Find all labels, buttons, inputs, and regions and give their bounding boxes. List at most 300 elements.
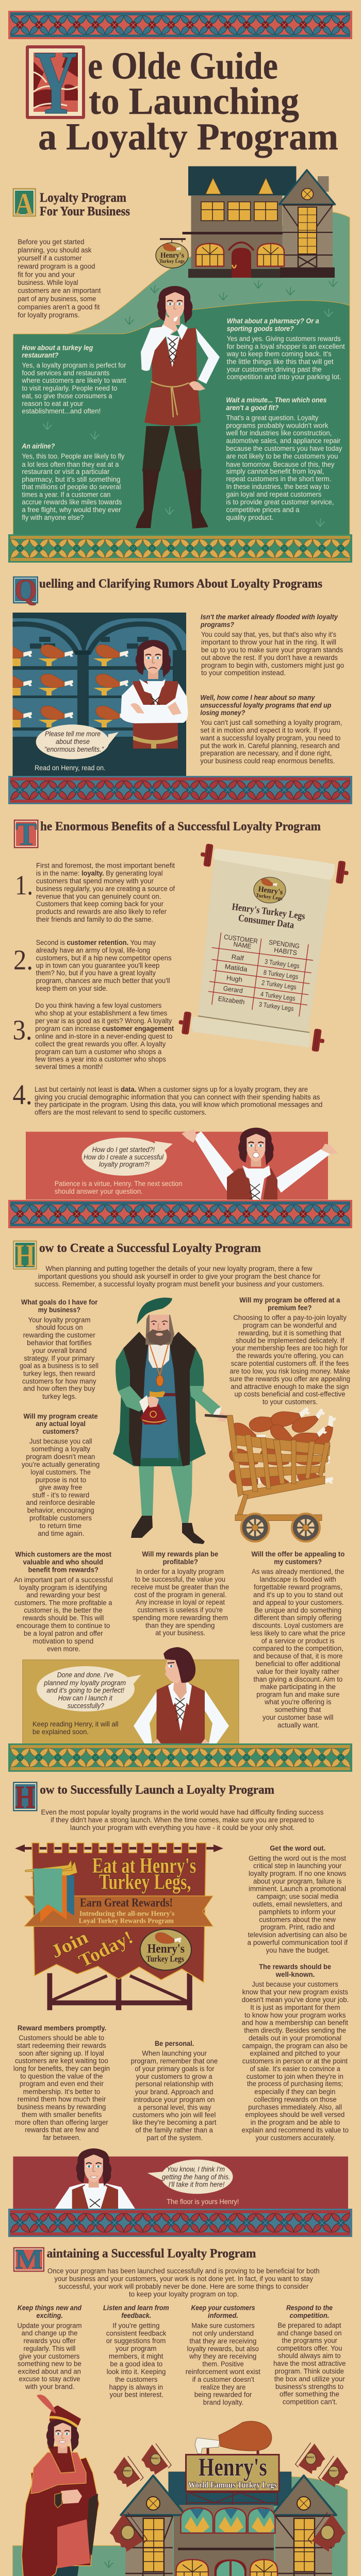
column: keep things new: Keep things new and — [18, 2304, 82, 2312]
text: which aren't a good fit: competitive prices and a — [226, 506, 300, 514]
text: actual loyal customers: stuff - it's to reward — [32, 1491, 89, 1499]
heading: A — [15, 187, 34, 221]
column: keep customers informed: realize they are — [201, 2383, 245, 2391]
text: get the word out: program. Print, radio and — [260, 1923, 334, 1931]
intro: successful, your work will probably never be done. Here are some things to consider — [58, 2282, 309, 2291]
table text: Elizabeth — [218, 995, 245, 1006]
text: be personal — [131, 2040, 218, 2142]
title text: to Launching — [89, 80, 299, 123]
text: appealing offer: Be unique and do something — [254, 1606, 341, 1614]
text: get the word out: campaign; use social media — [257, 1893, 339, 1900]
text: reward members promptly — [13, 2024, 110, 2141]
text: appealing offer: my customers? — [274, 1558, 322, 1566]
heading: he Enormous Benefits of a Successful Loyalty Program — [40, 820, 321, 834]
column: listen and learn: feedback. — [121, 2312, 151, 2319]
column: respond to the competition: offer something the — [280, 2391, 339, 2398]
intro: Even the most popular loyalty programs in the world would have had difficulty finding success — [41, 1808, 323, 1816]
text: appealing offer: what you're offering is — [264, 1698, 332, 1706]
text: most valuable customers: Which customers are the most — [15, 1551, 111, 1558]
roof sign: World Famous Turkey Legs — [188, 2480, 277, 2489]
intro text: planning, you should ask — [18, 246, 92, 254]
flag and wall logo lettering: Henry's — [151, 2458, 161, 2460]
text: goals: should focus on — [36, 1324, 83, 1331]
text: goals: rewarding the customer — [23, 1331, 95, 1339]
text: premium fee — [229, 1296, 350, 1405]
column: keep customers informed: Keep your customers — [191, 2304, 255, 2312]
benefit 2: customers, but if a hip new competitor opens — [36, 954, 172, 962]
text: well-known rewards: especially if they can begin — [254, 2088, 335, 2096]
intro: if they didn't have a strong launch. When the time comes, make sure you are prepared to — [51, 1816, 314, 1824]
flag and wall logo lettering — [123, 2456, 339, 2472]
text: well-known rewards: customer to join when they're in — [247, 2073, 343, 2080]
text: pharmacy: the little things like this that will get — [227, 358, 334, 366]
text: well-known rewards: your customers accurately. — [256, 2134, 335, 2142]
text: which aren't a good fit: is to provide great customer service, — [226, 498, 334, 506]
text: turkey leg restaurant: food services and restaurants — [22, 369, 110, 377]
heading: ow to Successfully Launch a Loyalty Program — [40, 1784, 274, 1797]
caption — [55, 1180, 183, 1195]
column: listen and learn: consistent feedback — [106, 2330, 167, 2337]
text: well-known rewards: explain and recommend its value to — [242, 2126, 349, 2134]
text: goals: your overall brand — [32, 1347, 87, 1354]
benefit 3: program can increase customer engagement — [35, 1025, 174, 1032]
text: which aren't a good fit: because the customers you have today — [226, 445, 342, 452]
text: get the word out: customers about the new — [259, 1916, 336, 1924]
panel: maintaining a successful loyalty program — [13, 2244, 348, 2576]
text: market flooded: program to begin with, customers might just go — [201, 662, 344, 669]
text: appealing offer: and it's up to you to stand out — [253, 1591, 343, 1599]
text: market flooded: important to throw your hat in the ring. It will — [201, 638, 336, 646]
speech bubble: done and done: Done and done. I've — [57, 1671, 113, 1679]
text: premium fee: are too low, you risk losing money. Make — [230, 1367, 350, 1375]
table text: Ralf — [231, 953, 244, 962]
text: goals: Your loyalty program — [28, 1316, 91, 1324]
text: appealing offer: and appeal to your customers. — [253, 1599, 343, 1606]
text: well-known rewards: them directly. Besides sending the — [244, 2027, 346, 2034]
text: profitable rewards plan: cost of the program in general. — [134, 1591, 226, 1599]
text: well-known rewards: and how a membership can benefit — [242, 2019, 348, 2027]
gables — [121, 2476, 336, 2576]
intro — [35, 1265, 324, 1288]
heading: Q — [14, 573, 37, 607]
cart of turkey legs — [205, 1400, 338, 1541]
benefit 3 — [12, 1002, 174, 1071]
column: respond to the competition: the box and utilize your — [274, 2375, 345, 2383]
logo: Henry's — [258, 885, 284, 896]
blue border one — [8, 776, 352, 804]
column: keep things new: exciting. — [36, 2312, 63, 2319]
benefit 3: several times a month! — [35, 1063, 103, 1071]
text: most valuable customers: valuable and who should — [23, 1558, 103, 1566]
panel: done and done — [23, 1647, 239, 1744]
text: be personal: of your primary goals is for — [135, 2065, 215, 2073]
text: appealing offer: beneficial to offer additional — [256, 1660, 340, 1668]
text: which aren't a good fit: well for industries like construction, — [225, 429, 332, 437]
text: premium fee: up costs beneficial and cost-effective — [234, 1390, 346, 1398]
benefit 2 — [13, 939, 172, 992]
benefit 1: products and rewards are also likely to refer — [36, 908, 167, 916]
text: be personal: personal relationship with — [135, 2080, 214, 2088]
text: get the word out: a powerful communication tool if — [248, 1939, 348, 1946]
text: premium fee: the rewards you're offering, you can — [236, 1352, 343, 1360]
column: keep customers informed: loyalty rewards, but also — [187, 2345, 259, 2352]
column: keep customers informed: why they are receiving — [189, 2352, 256, 2360]
text: which aren't a good fit: automotive sales, and appliance repair — [226, 437, 341, 445]
heading — [13, 1239, 261, 1274]
text: market flooded: be up to you to make sure your program stands — [201, 646, 343, 654]
benefit 2: them? No, but if you have a great loyalty — [36, 969, 156, 977]
text: reward members promptly: customers are kept waiting too — [15, 2057, 108, 2065]
green border one — [8, 534, 352, 563]
text: which aren't a good fit: have tomorrow. Because of this, they — [226, 461, 335, 468]
caption — [32, 1720, 119, 1736]
table text: Matilda — [224, 962, 248, 973]
column: keep customers informed: that they are receiving — [189, 2337, 256, 2345]
illuminated drop cap Y: Y — [34, 31, 77, 133]
title text — [38, 45, 338, 158]
benefit 3: per year is as good as it gets? Wrong. A loyalty — [35, 1017, 172, 1025]
benefit 3: few times a year into a customer who shops — [35, 1055, 166, 1063]
column: respond to the competition: have the most attractive — [273, 2360, 346, 2367]
text: airline: pharmacy, but it's still something — [22, 476, 120, 483]
intro: to keep your loyalty program on top. — [129, 2291, 239, 2298]
text: well-known rewards: know that your new program exists — [242, 1988, 348, 1996]
text: which aren't a good fit: In these industries, the best way to — [226, 483, 329, 490]
table text: SPENDING — [268, 938, 300, 950]
column: keep things new: give your customers — [19, 2352, 80, 2360]
text: reward members promptly: long for benefits, they can begin — [13, 2065, 110, 2072]
final restaurant building — [110, 2421, 348, 2576]
intro: success. Remember, a successful loyalty program must benefit your business and your customers. — [35, 1280, 324, 1288]
text: well-known rewards: employees should be well versed — [245, 2111, 344, 2119]
banner text: Loyal Turkey Rewards Program — [79, 1918, 174, 1925]
heading — [13, 187, 130, 221]
column: respond to the competition: competitors offer. You — [277, 2344, 342, 2352]
text: pharmacy: sporting goods store? — [227, 325, 294, 333]
text: profitable rewards plan: profitable? — [163, 1558, 198, 1566]
text: which aren't a good fit: Wait a minute... Then which ones — [226, 396, 327, 404]
ribbon — [24, 1896, 213, 1926]
text: turkey leg restaurant: to visit regularly. People need to — [22, 384, 117, 392]
column: listen and learn — [103, 2304, 169, 2399]
text: well-known rewards: Just because your customers — [252, 1980, 338, 1988]
text: appealing offer: discounts. Loyal customers are — [253, 1622, 343, 1629]
column: listen and learn: the customers — [115, 2376, 158, 2383]
scroll: consumer data table — [177, 843, 350, 1053]
column: respond to the competition: and change based on — [277, 2329, 341, 2337]
table text: HABITS — [273, 946, 298, 957]
text: reward members promptly: them with smaller benefits — [22, 2111, 102, 2119]
banner text: Today! — [75, 1927, 136, 1971]
flag and wall logo lettering: Henry's — [123, 2470, 133, 2472]
column: listen and learn: Listen and learn from — [103, 2304, 169, 2312]
text: most valuable customers: and rewarding your best — [26, 1591, 100, 1599]
blue border two — [8, 2209, 352, 2237]
text: unsuccessful programs: You can't just call something a loyalty program, — [200, 719, 342, 726]
benefit 1: revenue that you can genuinely count on. — [36, 892, 161, 901]
logo: Turkey Legs — [146, 1954, 184, 1963]
text: profitable rewards plan: than they are spending — [145, 1622, 215, 1629]
panel: loyalty program for your business — [13, 166, 350, 536]
text: actual loyal customers — [22, 1413, 100, 1537]
text: which aren't a good fit: gain loyal and repeat customers — [226, 490, 322, 498]
text: turkey leg restaurant: eat, so give those consumers a — [22, 392, 112, 400]
column: respond to the competition: competition can't. — [283, 2398, 337, 2406]
intro: important questions you should ask yourself in order to give your program the best chance for — [38, 1273, 321, 1280]
column: respond to the competition: Be prepared to adapt — [277, 2321, 341, 2329]
text: airline: a lot less often than they eat at a — [22, 461, 119, 468]
text: get the word out: television advertising can also be — [248, 1931, 347, 1939]
text: actual loyal customers: and time again. — [38, 1530, 84, 1537]
benefit 3: Do you think having a few loyal customers — [35, 1002, 162, 1009]
text: actual loyal customers: Just because you call — [29, 1437, 92, 1445]
intro: your business and your customers, your work is not done yet. In fact, if you want to stay — [54, 2275, 313, 2282]
text: get the word out: Get the word out. — [270, 1844, 325, 1852]
text: airline: fly with anyone else? — [22, 514, 84, 521]
logo: Henry's — [147, 1942, 185, 1956]
text: appealing offer: landscape is flooded with — [260, 1575, 336, 1583]
text: which aren't a good fit: aren't a good fit? — [226, 404, 278, 412]
column: listen and learn: happy is always in — [109, 2383, 163, 2391]
column: respond to the competition: business's strengths to — [275, 2383, 343, 2391]
intro text — [18, 238, 101, 319]
column: keep customers informed: not only understand — [192, 2330, 254, 2337]
caption: should answer your question. — [55, 1188, 143, 1195]
text: be personal: part of the system. — [146, 2134, 203, 2142]
column: keep things new: something new to be — [18, 2360, 81, 2368]
text: well-known rewards: explained and pitched to your — [250, 2049, 340, 2057]
text: appealing offer: different than simply offering — [254, 1614, 341, 1622]
heading: uelling and Clarifying Rumors About Loyalty Programs — [39, 578, 322, 591]
intro: When planning and putting together the details of your new loyalty program, there a few — [45, 1265, 313, 1273]
text: get the word out — [248, 1844, 348, 1954]
column: keep customers informed: if a customer doesn't — [192, 2376, 254, 2383]
column: respond to the competition: Respond to the — [286, 2304, 333, 2312]
text: turkey leg restaurant: Yes, a loyalty program is perfect for — [22, 362, 126, 369]
benefit 3: 3. — [12, 1014, 32, 1046]
text: most valuable customers: An important part of a successful — [14, 1576, 113, 1584]
text: well-known rewards: customers in person or at the point — [242, 2057, 348, 2065]
text: unsuccessful programs: Well, how come I hear about so many — [200, 693, 316, 702]
text: profitable rewards plan: at your business. — [155, 1629, 205, 1637]
text: get the word out: loyalty program. If no one knows — [249, 1870, 347, 1877]
caption: be explained soon. — [32, 1728, 89, 1736]
column: keep customers informed: Make sure customers — [191, 2321, 255, 2330]
intro text: customers are an important — [18, 287, 101, 295]
logo — [254, 877, 286, 903]
text: reward members promptly: to question the value of the — [20, 2072, 103, 2080]
text: goals: goal as a business is to sell — [20, 1362, 99, 1369]
text: be personal: like they're becoming a part — [133, 2119, 217, 2126]
banner text — [47, 1854, 196, 1971]
speech bubble: done and done: planned my loyalty program — [43, 1679, 126, 1687]
heading: H — [15, 1239, 35, 1274]
text: airline: that millions of people do several — [22, 483, 121, 490]
column: keep things new — [18, 2304, 82, 2391]
text: reward members promptly: Customers should be able to — [19, 2034, 104, 2042]
text: most valuable customers: encourage them to continue to — [17, 1622, 110, 1630]
text: appealing offer: compared to the competition, — [253, 1645, 343, 1652]
intro text: business. While loyal — [18, 279, 78, 286]
text: most valuable customers: loyalty program is identifying — [20, 1584, 107, 1591]
stained glass windows — [180, 2508, 275, 2533]
intro text: Before you get started — [18, 238, 84, 246]
text: market flooded: to your competition instead. — [201, 669, 286, 677]
table text: Gerard — [223, 985, 243, 994]
column: keep things new: with your brand. — [25, 2383, 75, 2391]
text: profitable rewards plan — [131, 1550, 229, 1637]
column: keep customers informed: being rewarded for — [194, 2391, 252, 2399]
text: premium fee: sure the rewards you offer are appealing — [229, 1375, 350, 1383]
text: reward members promptly: program and even end their — [20, 2080, 104, 2088]
benefit 2: up in town can you guarantee you'll keep — [36, 961, 159, 970]
lower windows and door — [176, 2560, 277, 2576]
benefit 1: business regularly, you are creating a source of — [36, 885, 175, 892]
speech bubble: please tell me more — [36, 724, 119, 759]
column: keep things new: excited about and an — [18, 2368, 81, 2375]
text: profitable rewards plan: Any increase in loyal or repeat — [136, 1598, 225, 1606]
text: profitable rewards plan: customers is useless if you're — [137, 1606, 223, 1614]
text: actual loyal customers: program doesn't mean — [26, 1453, 95, 1461]
column: keep customers informed — [186, 2304, 260, 2406]
text: well-known rewards — [242, 1963, 349, 2142]
text: well-known rewards: It is just as important for them — [250, 2004, 340, 2011]
text: reward members promptly: rewards that are few and — [25, 2126, 99, 2134]
benefit 1: Customers that keep coming back for your — [36, 900, 163, 908]
text: unsuccessful programs: set it in motion and expect it to work. If you — [200, 726, 330, 734]
text: most valuable customers: customers. The more profitable a — [14, 1599, 112, 1606]
text: pharmacy: Yes and yes. Giving customers rewards — [227, 335, 341, 343]
text: goals: strategy. If your primary — [24, 1354, 95, 1362]
column: keep customers informed: them. Positive — [202, 2360, 244, 2368]
column: respond to the competition: program. Think outside — [275, 2367, 344, 2375]
text: turkey leg restaurant: where customers are likely to want — [21, 377, 126, 384]
text: airline: An airline? — [21, 442, 55, 450]
shop sign: Henry's — [160, 251, 184, 260]
text: appealing offer: actually want. — [277, 1721, 319, 1729]
text: actual loyal customers: to return time — [40, 1522, 81, 1530]
text: get the word out: about your program, failure is — [253, 1877, 342, 1885]
speech bubble: getting the hang of this — [147, 2160, 233, 2194]
text: goals: turkey legs. — [42, 1393, 77, 1400]
text: profitable rewards plan: In order for a loyalty program — [136, 1568, 224, 1575]
text: turkey leg restaurant: restaurant? — [22, 351, 58, 359]
text: unsuccessful programs — [200, 693, 342, 765]
text: airline — [21, 442, 125, 521]
text: most valuable customers: rewards should be. This will — [23, 1614, 104, 1622]
heading: Loyalty Program — [40, 191, 126, 205]
text: premium fee: and attractive enough to make the sign — [231, 1383, 349, 1391]
text: airline: accrue rewards like miles towards — [22, 498, 122, 506]
king Henry figure — [22, 2395, 99, 2576]
intro text: fit for you and your — [18, 270, 75, 278]
banner text: Introducing the all-new Henry's — [79, 1910, 175, 1918]
speech bubble: getting the hang of this: I'll take it from here! — [169, 2180, 225, 2189]
text: pharmacy — [226, 317, 345, 381]
text: appealing offer: forgettable reward programs, — [254, 1583, 342, 1591]
column: keep things new: and change up the — [22, 2329, 77, 2337]
benefit 3: program can turn a customer who shops a — [35, 1048, 162, 1056]
benefit 1: their friends and family to do the same. — [36, 916, 153, 923]
text: actual loyal customers: something a loyalty — [31, 1445, 90, 1453]
text: well-known rewards: in the program and be able to — [251, 2119, 340, 2126]
text: well-known rewards: details out in your promotional — [249, 2034, 341, 2042]
speech bubble: please tell me more: Please tell me more — [45, 730, 101, 738]
column: listen and learn: your best interest. — [109, 2391, 163, 2399]
table text: NAME — [233, 940, 252, 950]
text: be personal: program, remember that one — [131, 2057, 218, 2065]
lower flags — [110, 2513, 346, 2552]
text: reward members promptly: more often than offering larger — [15, 2119, 108, 2126]
banner text: Join — [47, 1926, 91, 1962]
text: be personal: introduce your program on — [134, 2096, 215, 2104]
intro — [41, 1808, 323, 1832]
giant turkey leg sign — [195, 2421, 272, 2455]
text: appealing offer: than giving a discount. Aim to — [254, 1675, 342, 1683]
text: well-known rewards: purchases immediately. Also, all — [248, 2103, 342, 2111]
text: market flooded: Isn't the market already flooded with loyalty — [201, 613, 338, 621]
caption: Patience is a virtue, Henry. The next section — [55, 1180, 183, 1188]
text: profitable rewards plan: to be successful, the value you — [135, 1575, 225, 1583]
column: keep things new: rewards you offer — [24, 2337, 76, 2345]
speech bubble: please tell me more: about these — [56, 738, 90, 745]
benefit 1 — [15, 861, 175, 923]
speech bubble: how do I get started — [81, 1138, 173, 1176]
Henry arms crossed — [121, 640, 188, 749]
text: which aren't a good fit: programs probably wouldn't work — [226, 421, 329, 430]
text: which aren't a good fit: simply cannot benefit from loyal, — [226, 468, 324, 475]
intro: Once your program has been launched successfully and is proving to be beneficial for both — [47, 2267, 320, 2275]
text: unsuccessful programs: your business could reap enormous benefits. — [200, 757, 335, 765]
text: unsuccessful programs: want a successful loyalty program, you need to — [200, 734, 340, 742]
benefit 2: keep them on your side. — [36, 985, 108, 992]
text: pharmacy: your customers driving past the — [227, 366, 322, 373]
text: get the word out: Getting the word out is the most — [249, 1855, 346, 1862]
benefit 3: collect the great rewards you offer. A loyalty — [35, 1040, 166, 1048]
text: well-known rewards: The rewards should be — [259, 1963, 331, 1971]
table text: CUSTOMER — [223, 933, 258, 945]
text: actual loyal customers: behavior, encouraging — [27, 1506, 94, 1514]
Henry smiling — [55, 2148, 135, 2209]
benefit 1: is in the name: loyalty. By generating loyal — [36, 870, 163, 877]
Henry in profile — [134, 1647, 229, 1743]
text: unsuccessful programs: losing money? — [200, 709, 245, 717]
shop sign: Turkey Legs — [159, 259, 185, 264]
text: premium fee: program can be wonderful and — [243, 1321, 337, 1329]
text: goals: What goals do I have for — [21, 1298, 98, 1306]
text: most valuable customers: customer is, the better the — [24, 1606, 103, 1614]
logo — [140, 1929, 191, 1970]
intro text: yourself if a customer — [18, 255, 82, 262]
text: actual loyal customers: any actual loyal — [36, 1420, 86, 1428]
benefit 4 — [12, 1079, 322, 1116]
text: airline: restaurant or visit a particular — [22, 468, 110, 476]
text: appealing offer: program fun and make sure — [256, 1691, 339, 1698]
column: keep things new: Update your program — [18, 2321, 81, 2330]
text: unsuccessful programs: preparation are necessary, and if done right, — [200, 749, 332, 757]
column: keep customers informed: brand loyalty. — [203, 2399, 243, 2406]
logo: Turkey Legs — [255, 893, 283, 902]
speech bubble: how do I get started: How do I get started?! — [92, 1146, 155, 1154]
text: appealing offer — [251, 1550, 346, 1729]
green hills — [13, 212, 350, 536]
scroll heading — [230, 902, 306, 932]
banner text: Earn Great Rewards! — [80, 1896, 173, 1909]
text: which aren't a good fit: are not likely to be the customers you — [226, 452, 338, 460]
benefit 3: who shop at your establishment a few times — [35, 1009, 168, 1017]
text: actual loyal customers: Will my program create — [24, 1413, 98, 1420]
benefit 3: online and in-store in a never-ending quest to — [35, 1032, 172, 1040]
